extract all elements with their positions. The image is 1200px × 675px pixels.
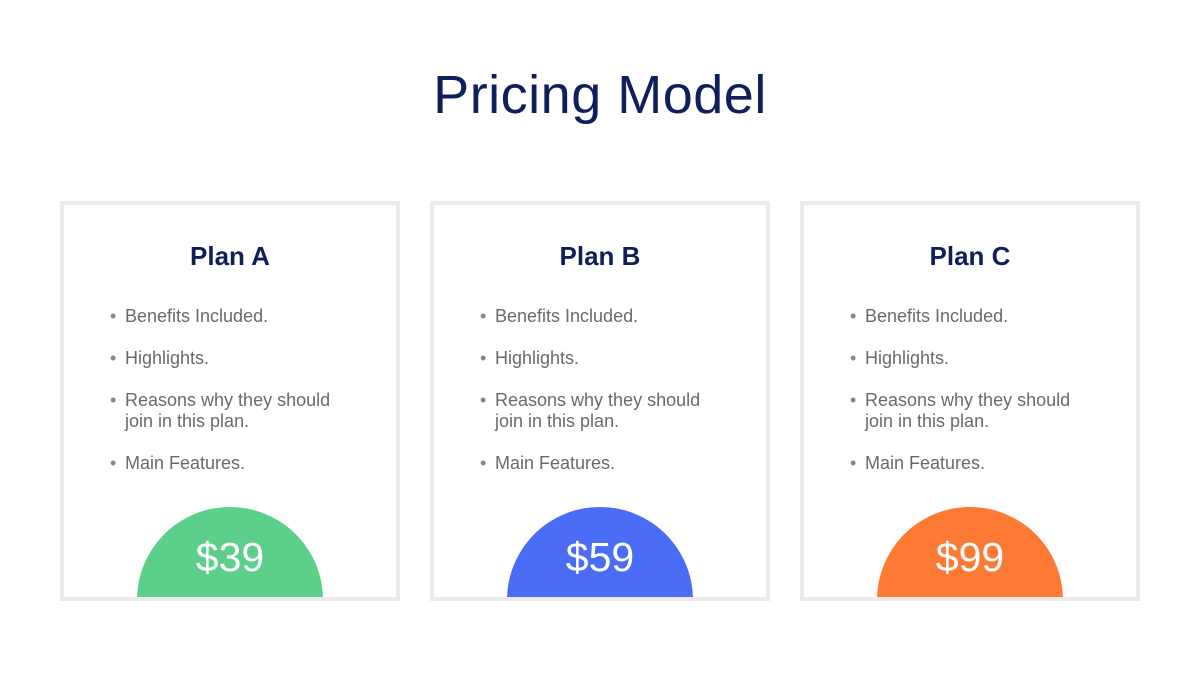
panel: plan B bbox=[430, 201, 770, 601]
bullet list: plan C: Reasons why they should join in this plan. bbox=[865, 390, 1070, 431]
price: $39: $39 bbox=[196, 534, 264, 580]
bullet list: plan B: Highlights. bbox=[495, 348, 579, 368]
bullet list: plan B bbox=[480, 306, 700, 473]
bullet list: plan A: Reasons why they should join in this plan. bbox=[125, 390, 330, 431]
title: Pricing Model bbox=[433, 65, 767, 125]
semicircle: plan B price badge bbox=[507, 507, 693, 675]
bullet list: plan B: Main Features. bbox=[495, 453, 615, 473]
bullet list: plan C: Main Features. bbox=[865, 453, 985, 473]
bullet list: plan B: Reasons why they should join in this plan. bbox=[495, 390, 700, 431]
heading: plan A: Plan A bbox=[190, 241, 270, 271]
bullet list: plan C bbox=[850, 306, 1070, 473]
bullet list: plan C: Highlights. bbox=[865, 348, 949, 368]
heading: plan B: Plan B bbox=[560, 241, 640, 271]
price: $99: $99 bbox=[936, 534, 1004, 580]
bullet list: plan A: Benefits Included. bbox=[125, 306, 268, 326]
bullet list: plan A bbox=[110, 306, 330, 473]
bullet list: plan C: Benefits Included. bbox=[865, 306, 1008, 326]
heading: plan C: Plan C bbox=[930, 241, 1010, 271]
price: $59: $59 bbox=[566, 534, 634, 580]
bullet list: plan B: Benefits Included. bbox=[495, 306, 638, 326]
semicircle: plan A price badge bbox=[137, 507, 323, 675]
semicircle: plan C price badge bbox=[877, 507, 1063, 675]
bullet list: plan A: Highlights. bbox=[125, 348, 209, 368]
panel: plan A bbox=[60, 201, 400, 601]
bullet list: plan A: Main Features. bbox=[125, 453, 245, 473]
panel: plan C bbox=[800, 201, 1140, 601]
